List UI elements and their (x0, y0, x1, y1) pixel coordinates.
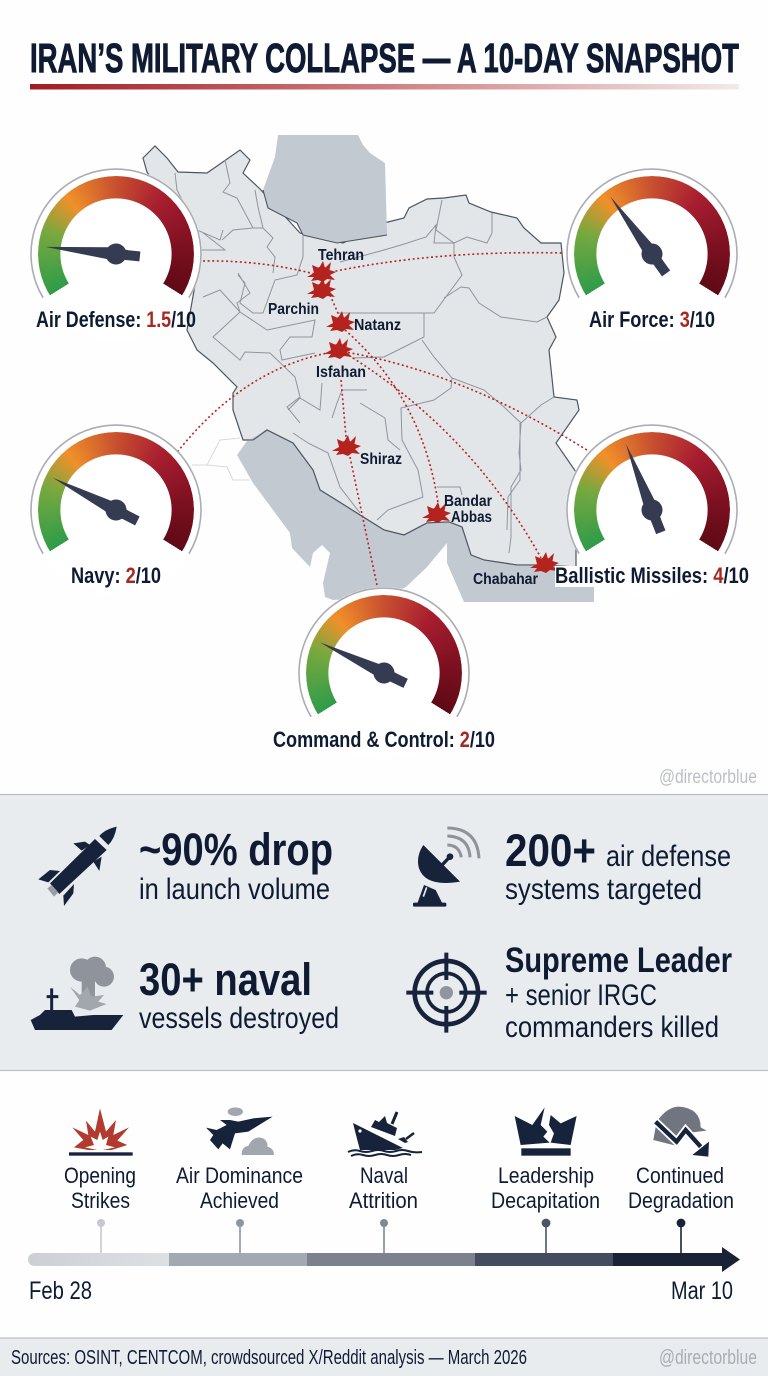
milestone: opening strikes (64, 1108, 136, 1254)
milestone: continued degradation: Continued (636, 1163, 724, 1188)
stat: air defense systems: air defense (606, 840, 731, 873)
stat: leadership killed: + senior IRGC (505, 979, 657, 1012)
start date: Feb 28 (29, 1277, 92, 1305)
gauge: Command and Control (273, 587, 495, 759)
gauge: Ballistic Missiles (555, 424, 751, 596)
milestone: opening strikes: Strikes (71, 1188, 130, 1213)
gauge: Air Force: Air Force: 3/10 (589, 307, 715, 332)
milestone: leadership decapitation (491, 1107, 600, 1254)
timeline (28, 1107, 740, 1305)
city labels: Natanz (354, 317, 401, 334)
stat: air defense systems (505, 825, 731, 906)
neighbouring faint borders (192, 438, 250, 480)
gauge: Navy (30, 424, 202, 596)
Caspian Sea (263, 135, 387, 243)
panel: key statistics (0, 794, 768, 1070)
city labels: Isfahan (316, 364, 366, 381)
gauge: Air Force (566, 168, 738, 340)
strike markers (307, 261, 559, 573)
southern shoreline (243, 430, 541, 565)
city labels: Tehran (318, 247, 364, 264)
timeline arrow bar (28, 1247, 740, 1272)
stat: launch volume: ~90% drop (139, 824, 333, 875)
icon: missile (38, 827, 117, 906)
gauge: Navy: Navy: 2/10 (71, 563, 161, 588)
stat: naval vessels: 30+ naval (139, 954, 312, 1005)
gauge: Ballistic Missiles: Ballistic Missiles: 4/10 (555, 563, 749, 588)
stat: leadership killed: commanders killed (505, 1011, 719, 1044)
stat: naval vessels: vessels destroyed (139, 1002, 339, 1035)
city labels (268, 247, 538, 588)
city labels: Abbas (451, 509, 492, 526)
milestone: naval attrition (348, 1112, 422, 1254)
stat: launch volume: in launch volume (139, 873, 330, 906)
milestone: continued degradation (628, 1107, 734, 1254)
milestone: air dominance: Air Dominance (176, 1163, 303, 1188)
gauge: Air Defense (30, 168, 202, 340)
stat: launch volume (139, 824, 333, 906)
gauge: Command and Control: Command & Control: 2/10 (273, 727, 495, 752)
city labels: Shiraz (360, 451, 402, 468)
milestone: opening strikes: Opening (64, 1163, 136, 1188)
icon: crosshair target (406, 953, 487, 1033)
province borders (175, 160, 554, 553)
title underline (30, 84, 739, 90)
end date: Mar 10 (671, 1277, 733, 1305)
city labels: Chabahar (473, 571, 538, 588)
footer (0, 1338, 768, 1376)
milestone: air dominance: Achieved (200, 1188, 279, 1213)
stat: naval vessels (139, 954, 339, 1035)
stat: air defense systems: systems targeted (505, 873, 702, 906)
city labels: Parchin (268, 301, 319, 318)
milestone: naval attrition: Attrition (349, 1188, 418, 1213)
stat: leadership killed (505, 941, 732, 1044)
map of Iran with strike sites (143, 135, 594, 602)
milestone: continued degradation: Degradation (628, 1188, 734, 1213)
milestone: air dominance (176, 1107, 303, 1254)
Iran landmass (143, 146, 579, 567)
sources: Sources: OSINT, CENTCOM, crowdsourced X/Reddit analysis — March 2026 (11, 1347, 527, 1369)
milestone: leadership decapitation: Decapitation (491, 1188, 600, 1213)
strike route lines (175, 253, 590, 590)
gauge: Air Defense: Air Defense: 1.5/10 (36, 307, 196, 332)
icon: radar dish (413, 828, 479, 907)
city labels: Bandar (444, 493, 492, 510)
milestone: naval attrition: Naval (360, 1163, 408, 1188)
Persian Gulf and Gulf of Oman (237, 430, 594, 602)
Caspian shoreline (263, 190, 387, 243)
icon: exploding warship (31, 957, 123, 1030)
stat: air defense systems: 200+ (505, 825, 596, 876)
milestone: leadership decapitation: Leadership (498, 1163, 594, 1188)
